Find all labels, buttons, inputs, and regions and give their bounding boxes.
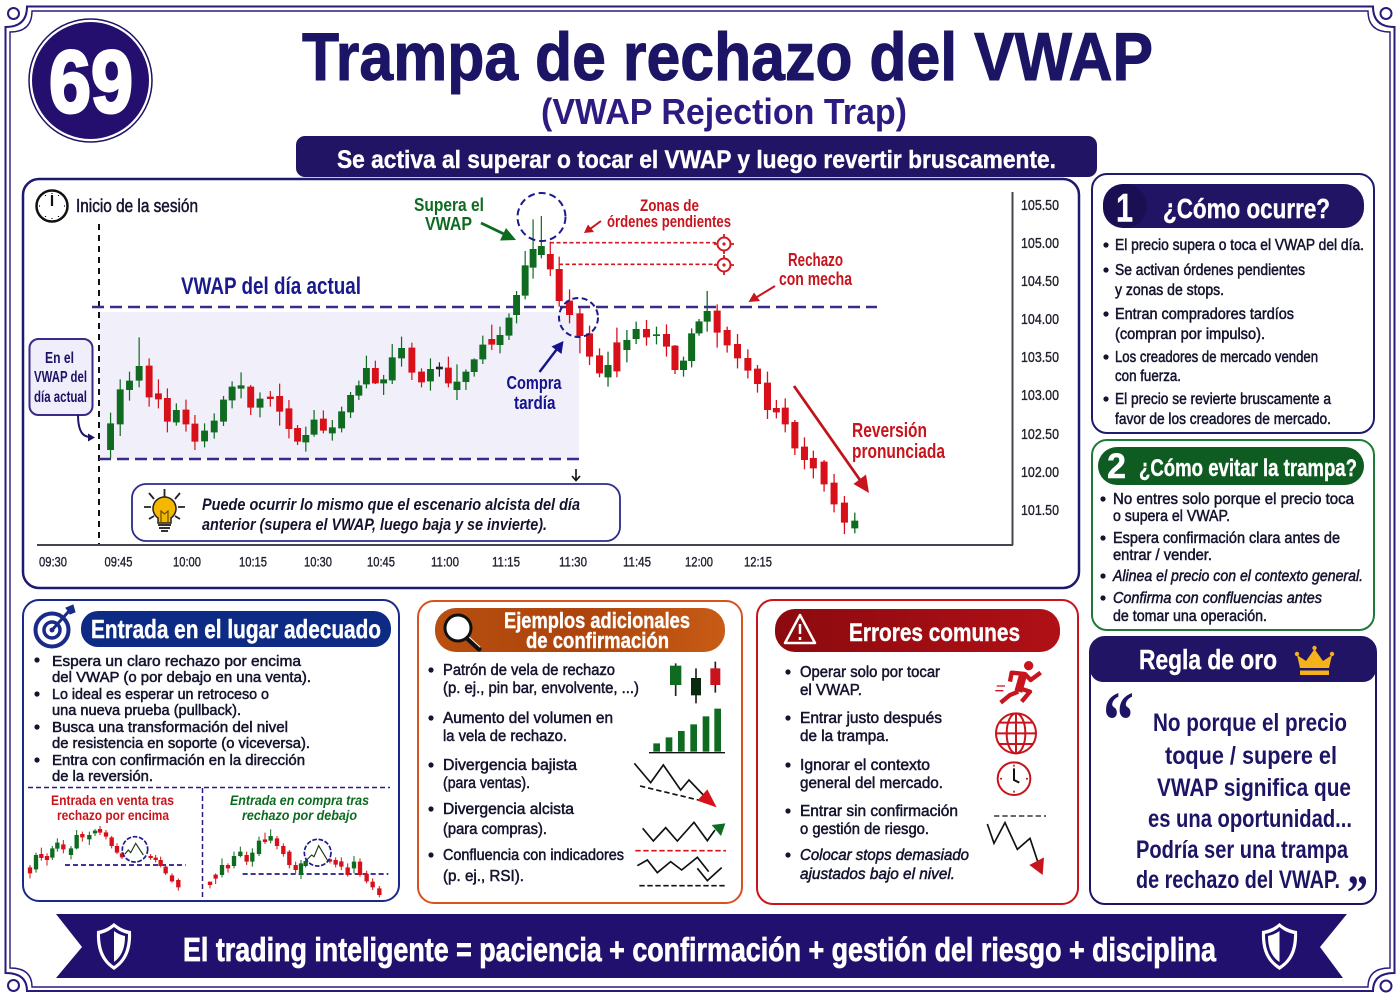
- label: breaks VWAP: VWAP: [425, 213, 472, 234]
- bullet list: Se activan órdenes pendientes: [1115, 262, 1305, 279]
- bullet list: de tomar una operación.: [1113, 608, 1267, 625]
- icon: bearish divergence: [634, 763, 717, 807]
- candlesticks: [111, 216, 855, 534]
- callout: same as previous day: anterior (supera el VWAP, luego baja y se invierte).: [202, 516, 547, 534]
- bullet list: entrar / vender.: [1113, 547, 1212, 564]
- bullet list: [428, 662, 639, 885]
- title: Trampa de rechazo del VWAP: [302, 19, 1153, 95]
- bullet list: de la reversión.: [52, 769, 153, 785]
- icon: warning triangle: [785, 615, 815, 643]
- heading: how to avoid the trap: 2: [1107, 447, 1126, 486]
- marker: wick high circle: [518, 193, 566, 241]
- bullet list: Entrar sin confirmación: [800, 803, 958, 820]
- label: session start: Inicio de la sesión: [76, 196, 198, 216]
- panel: entering at the right place: [23, 600, 399, 901]
- time axis labels: 10:00: [173, 554, 201, 570]
- bullet list: una nueva prueba (pullback).: [52, 703, 241, 719]
- label: breaks VWAP: Supera el: [414, 194, 484, 215]
- quotation text: VWAP significa que: [1157, 774, 1351, 802]
- time axis labels: 12:15: [744, 554, 772, 570]
- quotation text: es una oportunidad...: [1148, 805, 1352, 833]
- icon: bullish divergence: [643, 822, 725, 841]
- price axis labels: 103.00: [1021, 387, 1059, 404]
- bullet list: [1103, 237, 1364, 428]
- bullet list: o supera el VWAP.: [1113, 508, 1230, 525]
- panel: common mistakes: [757, 600, 1078, 904]
- bullet list: ajustados bajo el nivel.: [800, 866, 955, 883]
- bullet list: el VWAP.: [800, 682, 862, 699]
- label: wick rejection: Rechazo: [788, 250, 843, 270]
- price axis labels: 101.50: [1021, 502, 1059, 519]
- badge: number 69: [29, 19, 152, 142]
- callout: same as previous day: Puede ocurrir lo mismo que el escenario alcista del día: [202, 496, 580, 514]
- bullet list: favor de los creadores de mercado.: [1115, 411, 1331, 428]
- bullet list: (p. ej., pin bar, envolvente, ...): [443, 680, 639, 697]
- icon: session clock: [36, 190, 68, 222]
- quotation text: de rechazo del VWAP.: [1136, 866, 1340, 894]
- bullet list: No entres solo porque el precio toca: [1113, 491, 1354, 508]
- mini chart: sell entry after rejection above: Entrada en venta tras: [51, 793, 174, 808]
- panel: candlestick chart: [23, 179, 1079, 588]
- bullet list: del VWAP (o por debajo en una venta).: [52, 670, 311, 686]
- quotation text: “: [1103, 674, 1134, 766]
- time axis labels: 11:30: [559, 554, 587, 570]
- bullet list: Espera un claro rechazo por encima: [52, 654, 302, 670]
- label: pending order zones: Zonas de: [640, 197, 699, 215]
- callout: at the current-day VWAP: [30, 339, 95, 442]
- panel: additional confirmation examples: [418, 601, 742, 903]
- time axis labels: 09:45: [104, 554, 133, 570]
- marker: late entry circle: [559, 298, 598, 337]
- price axis labels: 102.50: [1021, 426, 1059, 443]
- heading: entering at the right place: [81, 611, 391, 647]
- quotation text: ”: [1347, 864, 1368, 920]
- price axis labels: 104.50: [1021, 273, 1059, 290]
- mini chart: buy entry after rejection below: [210, 793, 388, 897]
- bullet list: [785, 664, 969, 883]
- subtitle: (VWAP Rejection Trap): [541, 91, 907, 132]
- bullet list: Colocar stops demasiado: [800, 847, 969, 864]
- icon: magnifying glass: [445, 615, 480, 649]
- price axis labels: 102.00: [1021, 464, 1059, 481]
- panel: how to avoid the trap: [1092, 440, 1374, 630]
- icon: running figure: [995, 661, 1041, 703]
- bullet list: El precio supera o toca el VWAP del día.: [1115, 237, 1364, 254]
- zone below VWAP: [100, 312, 579, 459]
- time axis labels: 10:30: [304, 554, 332, 570]
- icon: clock: [998, 762, 1030, 795]
- time axis labels: [39, 554, 772, 570]
- label: late buy: [506, 341, 564, 413]
- label: late buy: Compra: [506, 373, 562, 393]
- callout: at the current-day VWAP: En el: [45, 350, 74, 367]
- mini chart: sell entry after rejection above: rechazo por encima: [57, 808, 169, 823]
- price axis labels: 104.00: [1021, 311, 1059, 328]
- callout: at the current-day VWAP: VWAP del: [34, 369, 87, 386]
- icon: light bulb: [144, 489, 185, 531]
- icon: rejection candles: [676, 662, 715, 703]
- time axis labels: 09:30: [39, 554, 67, 570]
- heading: additional confirmation examples: de confirmación: [526, 628, 669, 653]
- icon: left shield: [97, 923, 131, 970]
- bullet list: Aumento del volumen en: [443, 710, 613, 727]
- bullet list: Entran compradores tardíos: [1115, 306, 1294, 323]
- bullet list: Confirma con confluencias antes: [1113, 590, 1322, 607]
- heading: how it happens: 1: [1116, 186, 1133, 230]
- icon: right shield: [1262, 923, 1297, 970]
- price axis labels: 105.50: [1021, 197, 1059, 214]
- icon: indicator confluence: [635, 851, 726, 886]
- label: wick rejection: con mecha: [779, 269, 853, 289]
- bullet list: [34, 654, 311, 785]
- icon: target with arrow: [36, 605, 75, 646]
- callout: same as previous day: [132, 484, 620, 541]
- mini chart: buy entry after rejection below: Entrada en compra tras: [230, 793, 369, 808]
- label: sharp reversal with arrow: Reversión: [852, 420, 927, 442]
- heading: entering at the right place: Entrada en el lugar adecuado: [91, 614, 381, 644]
- bullet list: Patrón de vela de rechazo: [443, 662, 615, 679]
- bullet list: Busca una transformación del nivel: [52, 720, 288, 736]
- badge: number 69: 69: [49, 32, 133, 131]
- label: breaks VWAP: [414, 194, 516, 240]
- bullet list: (compran por impulso).: [1115, 326, 1265, 343]
- arrow: small down arrow: [572, 469, 580, 480]
- banner: activation summary: [296, 136, 1097, 177]
- label: wick rejection: [748, 250, 853, 302]
- heading: how to avoid the trap: [1098, 447, 1364, 486]
- time axis labels: 11:45: [623, 554, 651, 570]
- callout: at the current-day VWAP: día actual: [34, 389, 87, 406]
- bullet list: general del mercado.: [800, 775, 943, 792]
- icon: globe: [996, 713, 1036, 753]
- mini chart: buy entry after rejection below: rechazo por debajo: [242, 808, 357, 823]
- icon: crown: [1295, 646, 1334, 675]
- bullet list: El precio se revierte bruscamente a: [1115, 391, 1331, 408]
- bullet list: y zonas de stops.: [1115, 282, 1224, 299]
- bullet list: Los creadores de mercado venden: [1115, 349, 1318, 366]
- time axis labels: 12:00: [685, 554, 713, 570]
- label: sharp reversal with arrow: pronunciada: [852, 441, 946, 463]
- icon: falling price below level: [987, 816, 1046, 875]
- bullet list: (para compras).: [443, 821, 547, 838]
- bullet list: Confluencia con indicadores: [443, 847, 624, 864]
- label: pending order zones: órdenes pendientes: [607, 213, 731, 231]
- heading: additional confirmation examples: [435, 608, 725, 653]
- bullet list: Divergencia bajista: [443, 757, 577, 774]
- bullet list: o gestión de riesgo.: [800, 821, 929, 838]
- bullet list: Entrar justo después: [800, 710, 942, 727]
- heading: how it happens: ¿Cómo ocurre?: [1163, 193, 1330, 224]
- pending order levels with targets: [550, 234, 734, 275]
- heading: how it happens: [1103, 184, 1364, 230]
- icons: confirmation examples: [634, 662, 726, 886]
- bullet list: la vela de rechazo.: [443, 728, 567, 745]
- bullet list: Divergencia alcista: [443, 801, 574, 818]
- price axis labels: [1021, 197, 1059, 519]
- label: sharp reversal with arrow: [794, 386, 946, 493]
- bullet list: [1100, 491, 1363, 625]
- quotation text: [1103, 674, 1368, 920]
- banner: activation summary: Se activa al superar o tocar el VWAP y luego revertir bruscamente.: [337, 146, 1056, 174]
- price axis labels: 103.50: [1021, 349, 1059, 366]
- label: late buy: tardía: [514, 393, 556, 413]
- time axis labels: 11:15: [492, 554, 520, 570]
- heading: additional confirmation examples: Ejemplos adicionales: [504, 608, 690, 633]
- bullet list: de resistencia en soporte (o viceversa).: [52, 736, 310, 752]
- mini chart: sell entry after rejection above: [30, 793, 186, 891]
- bullet list: Alinea el precio con el contexto general.: [1112, 568, 1363, 585]
- bullet list: con fuerza.: [1115, 368, 1181, 385]
- panel: golden rule: [1090, 637, 1376, 920]
- bullet list: Ignorar el contexto: [800, 757, 930, 774]
- quotation text: toque / supere el: [1165, 742, 1337, 770]
- time axis labels: 10:45: [367, 554, 395, 570]
- time axis labels: 10:15: [239, 554, 267, 570]
- bullet list: de la trampa.: [800, 728, 889, 745]
- quotation text: No porque el precio: [1153, 709, 1347, 737]
- bullet list: Entra con confirmación en la dirección: [52, 753, 305, 769]
- heading: golden rule: Regla de oro: [1139, 644, 1277, 675]
- icon: volume bars: [649, 709, 725, 753]
- label: current-day VWAP: VWAP del día actual: [181, 273, 361, 300]
- label: pending order zones: [584, 197, 731, 233]
- bullet list: Espera confirmación clara antes de: [1113, 530, 1340, 547]
- price axis labels: 105.00: [1021, 235, 1059, 252]
- bullet list: (para ventas).: [443, 775, 530, 792]
- heading: golden rule: [1090, 637, 1376, 682]
- icons: common mistakes: [987, 661, 1046, 875]
- panel: how it happens: [1092, 174, 1374, 433]
- bullet list: Lo ideal es esperar un retroceso o: [52, 687, 269, 703]
- heading: common mistakes: Errores comunes: [849, 619, 1020, 647]
- bottom ribbon: [56, 914, 1347, 978]
- bullet list: (p. ej., RSI).: [443, 868, 524, 885]
- time axis labels: 11:00: [431, 554, 459, 570]
- bullet list: Operar solo por tocar: [800, 664, 940, 681]
- quotation text: Podría ser una trampa: [1136, 836, 1349, 864]
- heading: common mistakes: [775, 609, 1060, 652]
